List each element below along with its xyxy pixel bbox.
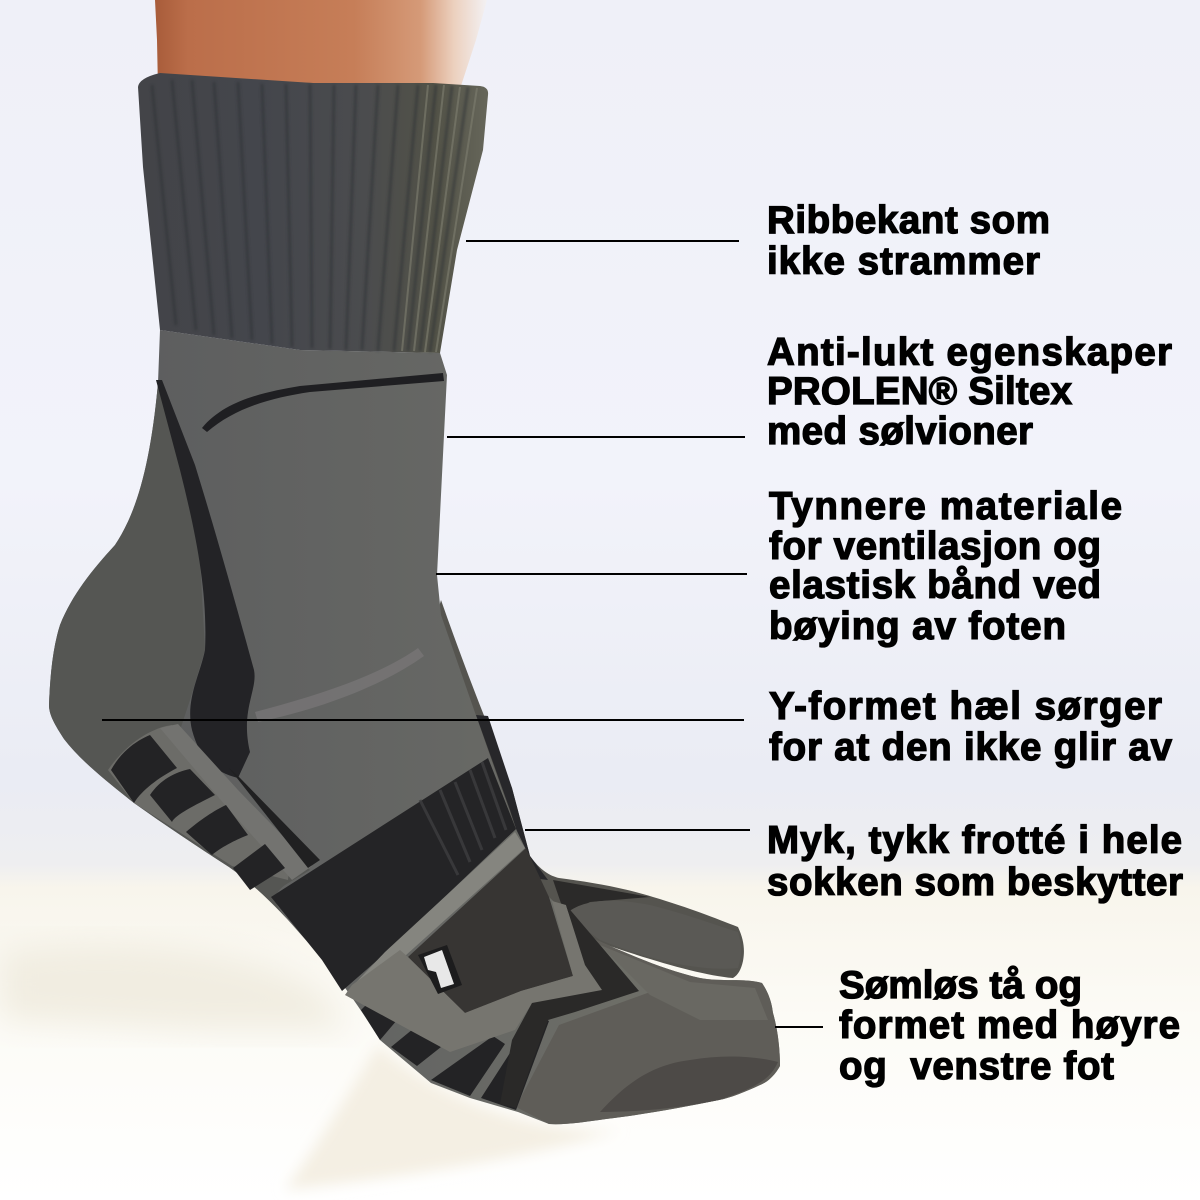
leg skin <box>155 0 487 95</box>
callout: thinner material: Tynnere materiale <box>769 485 1122 528</box>
dark chevron before toe <box>500 905 639 1108</box>
callout: anti-odour: Anti-lukt egenskaper <box>767 331 1172 374</box>
toe cap <box>516 938 780 1124</box>
ribbed cuff <box>138 73 488 353</box>
callout: soft terry <box>525 819 1183 904</box>
light band on ankle <box>255 648 424 722</box>
black forefoot band <box>271 758 516 991</box>
grey toe band <box>345 901 602 1052</box>
callout: ribbed edge: ikke strammer <box>767 240 1040 283</box>
logo <box>418 945 462 994</box>
callout: seamless toe: formet med høyre <box>839 1004 1180 1047</box>
callout: soft terry: sokken som beskytter <box>767 861 1183 904</box>
toe highlight <box>600 945 768 1020</box>
Y heel stripe <box>156 380 255 778</box>
callout: soft terry: Myk, tykk frotté i hele <box>767 819 1182 862</box>
heel and sole dark panel <box>49 383 310 938</box>
callout: Y-shaped heel <box>102 685 1173 769</box>
grey diagonal with black edge line <box>160 724 320 880</box>
callout: seamless toe: og venstre fot <box>839 1045 1114 1088</box>
callout: anti-odour: med sølvioner <box>767 410 1033 453</box>
callout: anti-odour <box>447 331 1172 453</box>
callout: seamless toe: Sømløs tå og <box>839 964 1082 1007</box>
sole grey between blocks <box>108 725 290 880</box>
black arm stripe <box>202 373 444 432</box>
callout: anti-odour: PROLEN® Siltex <box>767 370 1073 413</box>
sole blocks <box>111 735 549 1110</box>
callout: Y-shaped heel: for at den ikke glir av <box>769 726 1173 769</box>
midfoot dark panel <box>408 848 573 1013</box>
main sock: upper leg and foot silhouette <box>49 330 780 1124</box>
grey stripe <box>347 832 525 1000</box>
callout: seamless toe <box>775 964 1180 1088</box>
callout: thinner material: elastisk bånd ved <box>769 564 1101 607</box>
callout: thinner material: bøying av foten <box>769 605 1066 648</box>
callout: thinner material <box>436 485 1122 648</box>
callout: Y-shaped heel: Y-formet hæl sørger <box>769 685 1162 728</box>
rear foot <box>430 600 744 978</box>
callout: ribbed edge: Ribbekant som <box>767 199 1050 242</box>
callout: ribbed edge <box>466 199 1050 283</box>
callout: thinner material: for ventilasjon og <box>769 525 1101 568</box>
floor shadow <box>0 943 620 1190</box>
